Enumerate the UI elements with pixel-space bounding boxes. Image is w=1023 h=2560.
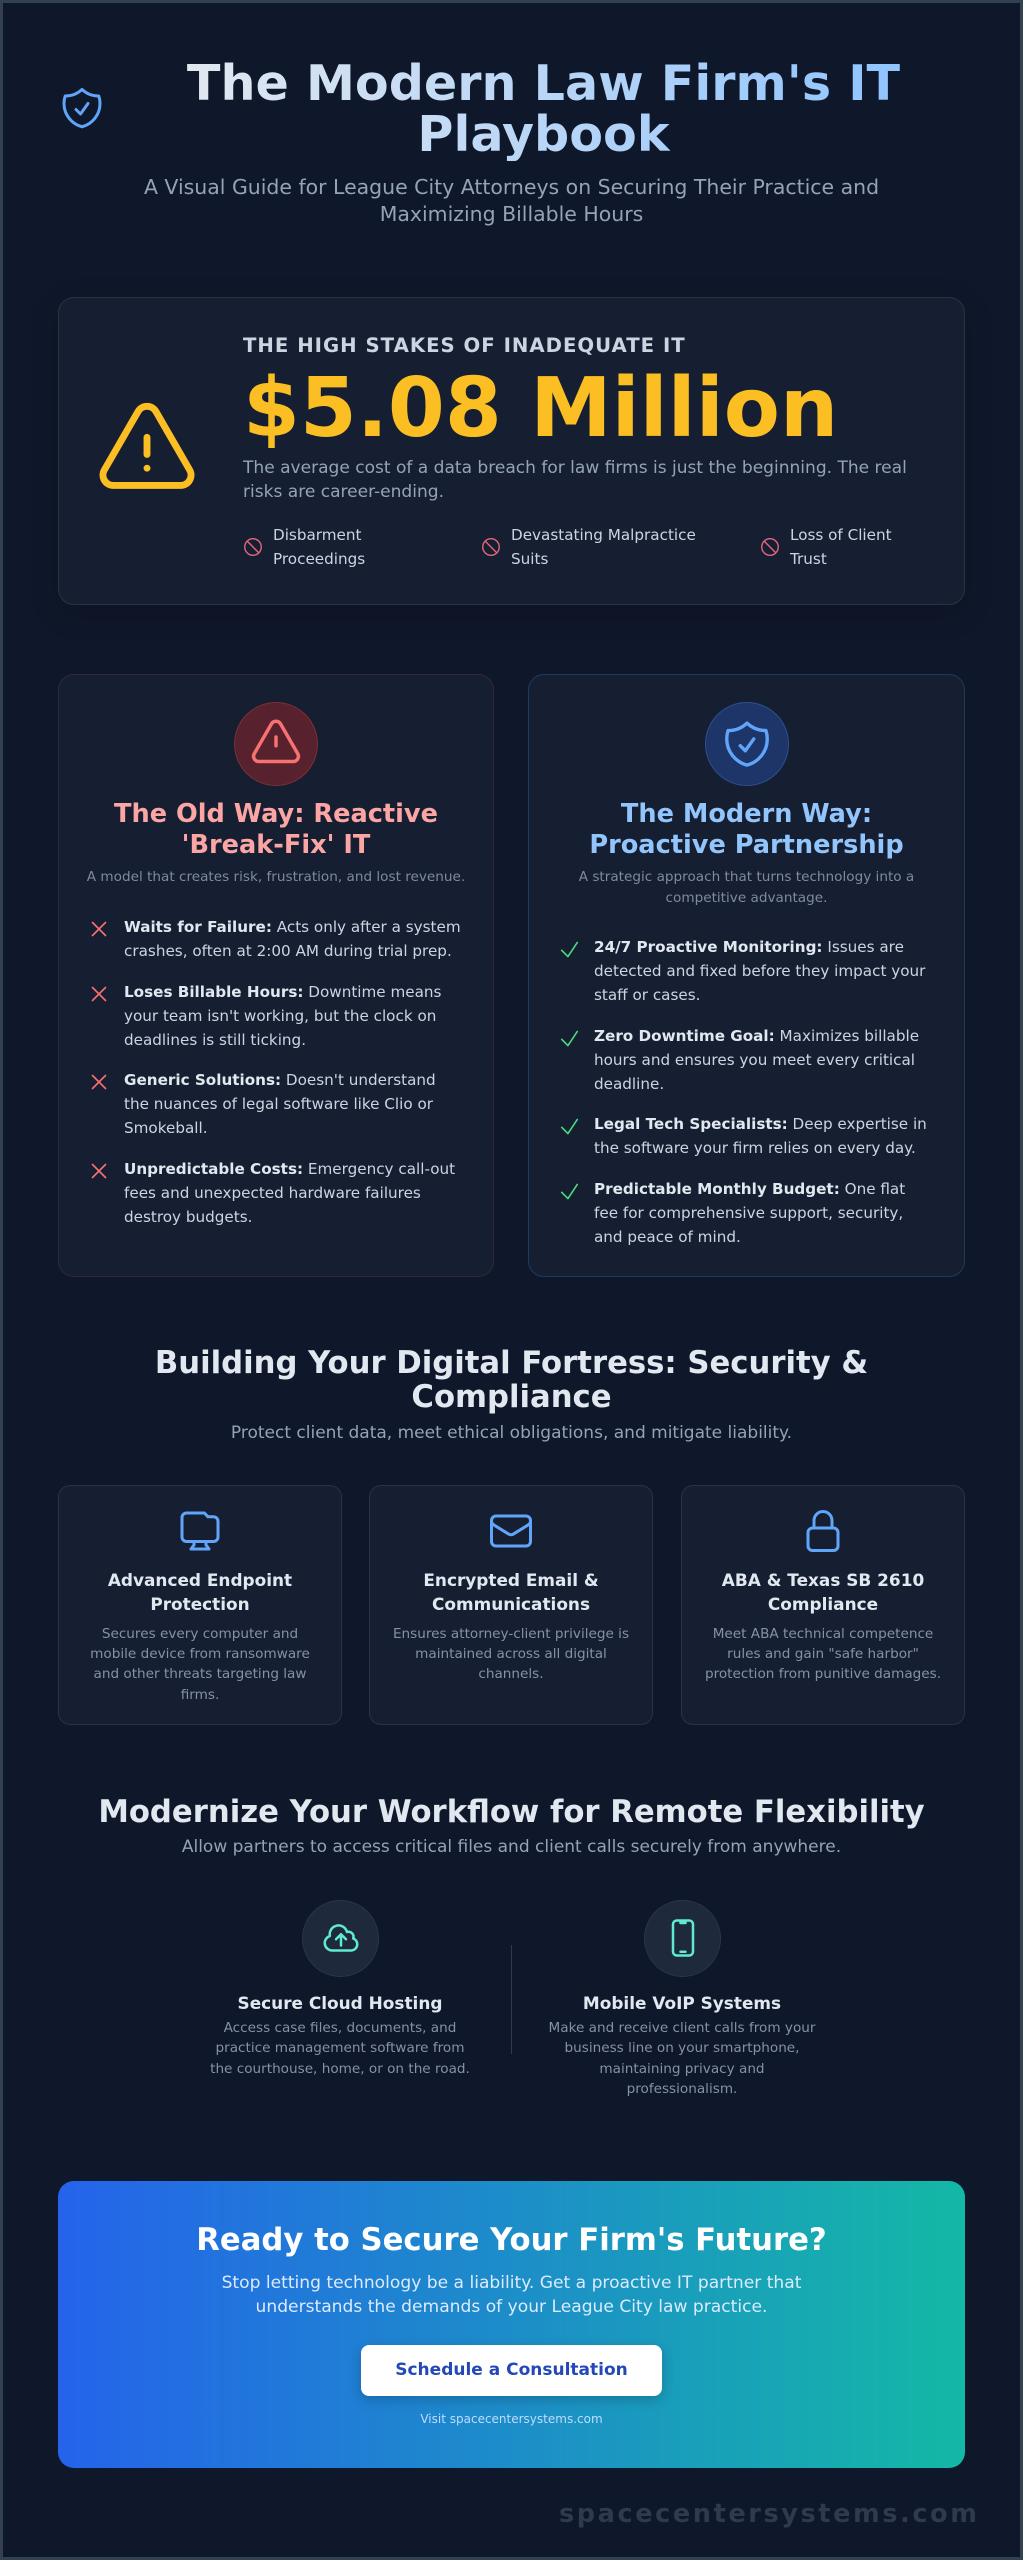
item: Legal Tech Specialists: Deep expertise in <box>594 1115 927 1133</box>
list: modern way <box>560 938 927 1246</box>
icon: cloud upload <box>302 1900 379 1976</box>
item: Zero Downtime Goal: Maximizes billable <box>594 1026 919 1044</box>
cta heading: Ready to Secure Your Firm's Future? <box>196 2222 827 2258</box>
block title: Mobile VoIP Systems <box>583 1992 781 2012</box>
item: Predictable Monthly Budget: One flat <box>594 1180 905 1198</box>
item <box>92 918 461 960</box>
item: your team isn't working, but the clock on <box>124 1007 436 1025</box>
cta text: Stop letting technology be a liability. Get a proactive IT partner that <box>222 2273 801 2293</box>
panel: compliance <box>681 1485 965 1725</box>
item <box>560 1115 927 1157</box>
subtitle: modern way <box>578 869 914 906</box>
heading: digital fortress <box>155 1346 868 1415</box>
description: risks are career-ending. <box>243 482 444 502</box>
card text: mobile device from ransomware <box>90 1646 310 1662</box>
item: deadline. <box>594 1074 664 1092</box>
card title <box>423 1570 599 1614</box>
subtitle <box>144 174 879 226</box>
item <box>560 1026 919 1092</box>
title <box>130 58 957 160</box>
risk: disbarment: Proceedings <box>273 550 365 568</box>
block: voip <box>549 1900 816 2097</box>
card text: rules and gain "safe harbor" <box>727 1646 919 1662</box>
item <box>560 938 926 1004</box>
icon: modern way shield <box>705 702 789 786</box>
heading: high stakes: THE HIGH STAKES OF INADEQUATE IT <box>243 334 686 357</box>
heading: old way: The Old Way: Reactive <box>114 799 438 829</box>
card title: Compliance <box>768 1594 878 1614</box>
block text: business line on your smartphone, <box>564 2040 800 2056</box>
subheading: digital fortress: Protect client data, meet ethical obligations, and mitigate liability. <box>231 1423 792 1443</box>
card text: maintained across all digital <box>415 1646 607 1662</box>
block text: Make and receive client calls from your <box>549 2020 815 2036</box>
card title: Advanced Endpoint <box>108 1570 292 1590</box>
block title: Secure Cloud Hosting <box>238 1992 442 2012</box>
subtitle: old way: A model that creates risk, frustration, and lost revenue. <box>87 869 465 885</box>
risk: malpractice: Suits <box>511 550 548 568</box>
card text: Secures every computer and <box>102 1626 298 1642</box>
risk: loss of trust <box>761 526 892 568</box>
item: Waits for Failure: Acts only after a system <box>124 918 461 936</box>
icon: ban <box>761 538 779 556</box>
panel: call to action <box>58 2181 965 2468</box>
heading: modern way: The Modern Way: <box>621 799 872 829</box>
item: hours and ensures you meet every critical <box>594 1050 915 1068</box>
icon: monitor <box>180 1512 220 1550</box>
title: Playbook <box>417 105 670 163</box>
item <box>92 1071 436 1137</box>
item: the software your firm relies on every day. <box>594 1139 916 1157</box>
icon: ban <box>482 538 500 556</box>
card text: Meet ABA technical competence <box>713 1626 933 1642</box>
subheading: remote flexibility: Allow partners to access critical files and client calls securely from anywhere. <box>182 1837 841 1857</box>
cta text: understands the demands of your League City law practice. <box>256 2297 767 2317</box>
block text: maintaining privacy and <box>599 2060 765 2076</box>
risk: loss of trust: Trust <box>790 550 827 568</box>
risk: malpractice: Devastating Malpractice <box>511 526 696 544</box>
block text: the courthouse, home, or on the road. <box>210 2060 470 2076</box>
item: Generic Solutions: Doesn't understand <box>124 1071 436 1089</box>
card text: and other threats targeting law <box>94 1666 306 1682</box>
heading: old way: 'Break-Fix' IT <box>182 830 370 860</box>
divider line <box>511 1945 512 2054</box>
heading: digital fortress: Building Your Digital Fortress: Security & <box>155 1346 868 1380</box>
item: fee for comprehensive support, security, <box>594 1204 903 1222</box>
title: The Modern Law Firm's IT <box>187 54 900 112</box>
icon: ban <box>244 538 262 556</box>
heading: old way <box>114 799 438 860</box>
description <box>242 458 907 502</box>
card title: ABA & Texas SB 2610 <box>722 1570 924 1590</box>
item <box>92 983 441 1049</box>
subtitle: modern way: A strategic approach that turns technology into a <box>579 869 914 885</box>
subtitle: Maximizing Billable Hours <box>380 202 643 226</box>
block text: practice management software from <box>215 2040 464 2056</box>
icon: header shield <box>62 88 102 128</box>
card title: Protection <box>150 1594 250 1614</box>
card title: Communications <box>432 1594 590 1614</box>
list: old way <box>92 918 461 1226</box>
item: and peace of mind. <box>594 1228 741 1246</box>
card text <box>393 1626 629 1682</box>
icon: old way warning <box>234 702 318 786</box>
panel: high stakes <box>58 297 965 605</box>
heading: digital fortress: Compliance <box>411 1380 612 1415</box>
item: staff or cases. <box>594 986 700 1004</box>
watermark: spacecentersystems.com <box>559 2499 979 2529</box>
item: Unpredictable Costs: Emergency call-out <box>124 1160 455 1178</box>
card title: Encrypted Email & <box>423 1570 599 1590</box>
subtitle: A Visual Guide for League City Attorneys on Securing Their Practice and <box>144 174 879 198</box>
heading: modern way: Proactive Partnership <box>589 830 904 860</box>
cta text <box>222 2273 802 2317</box>
card text: firms. <box>181 1687 219 1703</box>
item <box>560 1180 905 1246</box>
block text <box>210 2020 470 2076</box>
risk: disbarment <box>244 526 365 568</box>
heading: modern way <box>589 799 904 860</box>
card text: Ensures attorney-client privilege is <box>393 1626 629 1642</box>
statistic: breach cost: $5.08 Million <box>243 361 838 456</box>
panel: modern way <box>528 674 965 1277</box>
item: destroy budgets. <box>124 1208 252 1226</box>
item: 24/7 Proactive Monitoring: Issues are <box>594 938 904 956</box>
block text: Access case files, documents, and <box>224 2020 456 2036</box>
block text: professionalism. <box>627 2081 737 2097</box>
risk: disbarment: Disbarment <box>273 526 361 544</box>
item: Loses Billable Hours: Downtime means <box>124 983 441 1001</box>
panel: old way <box>58 674 494 1277</box>
icon: envelope <box>490 1514 532 1548</box>
card text <box>705 1626 941 1682</box>
item: detected and fixed before they impact your <box>594 962 925 980</box>
icon: warning triangle <box>100 402 194 489</box>
button: Schedule a Consultation <box>395 2360 628 2380</box>
card text <box>90 1626 310 1703</box>
card text: protection from punitive damages. <box>705 1666 941 1682</box>
item: the nuances of legal software like Clio or <box>124 1095 433 1113</box>
item <box>92 1160 455 1226</box>
item: deadlines is still ticking. <box>124 1031 306 1049</box>
icon: lock <box>806 1510 840 1552</box>
card title <box>108 1570 292 1614</box>
card text: channels. <box>478 1666 544 1682</box>
item: crashes, often at 2:00 AM during trial prep. <box>124 942 452 960</box>
panel: endpoint protection <box>58 1485 342 1725</box>
risk: malpractice <box>482 526 696 568</box>
panel: encrypted email <box>369 1485 653 1725</box>
item: Smokeball. <box>124 1119 208 1137</box>
website link: Visit spacecentersystems.com <box>420 2412 603 2426</box>
card title <box>722 1570 924 1614</box>
heading: remote flexibility: Modernize Your Workflow for Remote Flexibility <box>98 1794 925 1830</box>
item: fees and unexpected hardware failures <box>124 1184 421 1202</box>
block text <box>549 2020 816 2097</box>
icon: phone <box>644 1900 721 1976</box>
description: The average cost of a data breach for law firms is just the beginning. The real <box>243 458 907 478</box>
button <box>361 2345 662 2396</box>
block: cloud hosting <box>210 1900 470 2076</box>
risk: loss of trust: Loss of Client <box>790 526 892 544</box>
subtitle: modern way: competitive advantage. <box>666 890 827 906</box>
